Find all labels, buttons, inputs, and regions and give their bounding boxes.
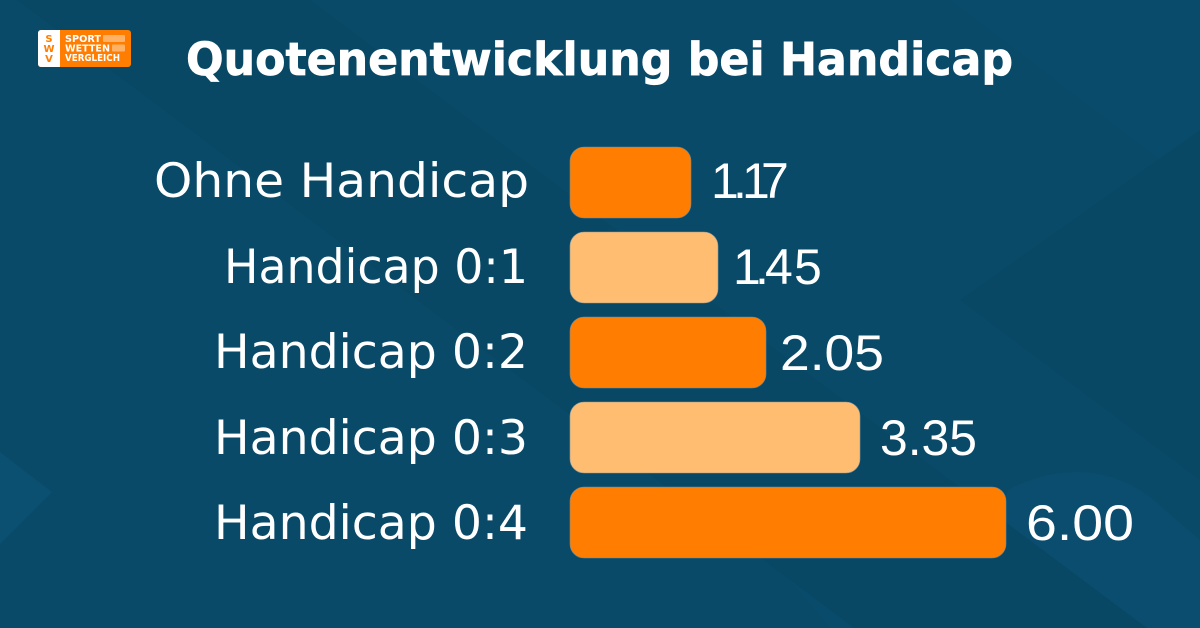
row: Ohne Handicap: 1.17 xyxy=(711,153,789,209)
logo: Sportwetten Vergleich: W xyxy=(43,44,55,55)
row: Handicap 0:3: 3.35 xyxy=(880,410,977,466)
row: Ohne Handicap: Ohne Handicap xyxy=(154,154,529,209)
row: Handicap 0:4 xyxy=(214,487,1134,558)
row: Handicap 0:2: 2.05 xyxy=(780,325,884,381)
row: Handicap 0:2 xyxy=(214,317,884,388)
logo: Sportwetten Vergleich: S xyxy=(45,34,53,45)
row: Handicap 0:3: Handicap 0:3 xyxy=(214,411,528,466)
bar chart xyxy=(154,147,1134,558)
row: Handicap 0:1 xyxy=(224,232,822,303)
row: Handicap 0:4: 6.00 xyxy=(1026,495,1134,551)
row: Handicap 0:1: 1.45 xyxy=(733,239,822,295)
row: Ohne Handicap xyxy=(154,147,789,218)
logo: Sportwetten Vergleich xyxy=(38,30,131,67)
row: Handicap 0:3 xyxy=(214,402,977,473)
logo: Sportwetten Vergleich: WETTEN xyxy=(65,44,110,54)
logo: Sportwetten Vergleich: VERGLEICH xyxy=(65,53,120,64)
row: Handicap 0:4: Handicap 0:4 xyxy=(214,496,528,551)
logo: Sportwetten Vergleich: SPORT xyxy=(65,34,101,45)
logo: Sportwetten Vergleich: V xyxy=(45,54,53,65)
title: Quotenentwicklung bei Handicap xyxy=(186,33,1013,86)
row: Handicap 0:2: Handicap 0:2 xyxy=(214,325,528,380)
row: Handicap 0:1: Handicap 0:1 xyxy=(224,240,528,295)
